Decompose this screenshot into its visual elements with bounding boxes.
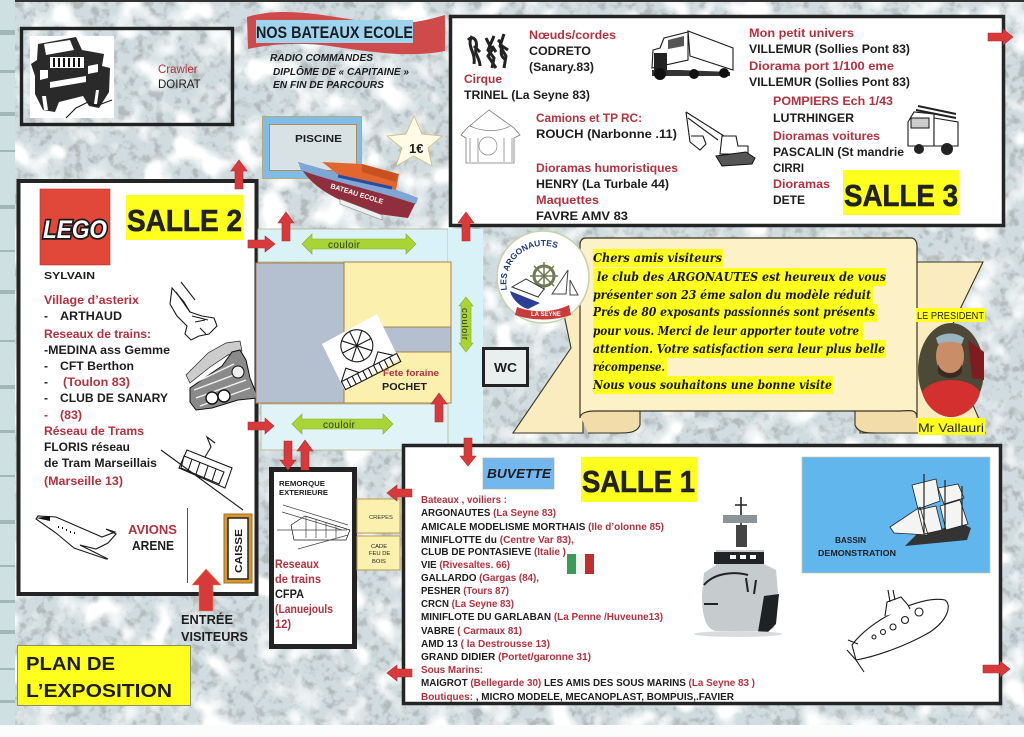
bassin demonstration: DEMONSTRATION — [818, 548, 896, 558]
list: salle 1 exhibitors: MINIFLOTE DU GARLABAN (La Penne /Huveune13) — [421, 611, 663, 623]
crawler text: DOIRAT — [158, 79, 201, 91]
text: radio commandes: DIPLÔME DE « CAPITAINE » — [273, 65, 409, 78]
list: salle 2 exhibitors: Village d’asterix — [44, 293, 139, 307]
list: salle 1 exhibitors: CLUB DE PONTASIEVE (Italie ) — [421, 546, 566, 558]
text: reseaux de trains: de trains — [275, 572, 321, 586]
text: radio commandes: EN FIN DE PARCOURS — [273, 80, 384, 91]
text: noeuds: CODRETO — [529, 44, 591, 58]
text: camions — [536, 111, 677, 141]
welcome text highlights — [593, 249, 886, 394]
list: salle 2 exhibitors: FLORIS réseau — [44, 440, 130, 454]
crawler text — [158, 64, 201, 91]
welcome text: attention. Votre satisfaction sera leur plus belle — [593, 341, 885, 356]
list: salle 2 exhibitors: CFT Berthon — [60, 359, 134, 373]
title: plan de l'exposition: L’EXPOSITION — [26, 680, 172, 701]
block: gray hall — [256, 263, 344, 403]
list: salle 1 exhibitors: AMD 13 ( la Destrousse 13) — [421, 638, 550, 650]
text: radio commandes — [270, 53, 409, 91]
list: salle 1 exhibitors: AMICALE MODELISME MORTHAIS (Ile d’olonne 85) — [421, 521, 664, 533]
crawler text: Crawler — [158, 64, 198, 76]
list: salle 1 exhibitors: ARGONAUTES (La Seyne 83) — [421, 507, 556, 519]
list: salle 1 exhibitors: VABRE ( Carmaux 81) — [421, 625, 522, 637]
box: cade feu de bois: FEU DE — [369, 551, 390, 557]
arrow: couloir bottom — [292, 414, 393, 434]
text: avions — [128, 522, 177, 553]
welcome text: le club des ARGONAUTES est heureux de vous — [597, 269, 886, 284]
icon: jeep — [30, 36, 114, 118]
title: plan de l'exposition — [18, 646, 190, 706]
photo: president — [918, 323, 984, 417]
text: noeuds: Nœuds/cordes — [529, 28, 616, 42]
text: pompiers: Dioramas voitures — [773, 129, 880, 143]
text: avions: ARENE — [132, 539, 174, 553]
text: entree visiteurs: VISITEURS — [181, 630, 248, 644]
list: salle 1 exhibitors — [421, 494, 755, 703]
list: salle 1 exhibitors: Sous Marins: — [421, 664, 483, 676]
text: pompiers: POMPIERS Ech 1/43 — [773, 94, 893, 108]
welcome text: Nous vous souhaitons une bonne visite — [592, 377, 832, 392]
list: salle 2 exhibitors: - — [44, 408, 48, 422]
list: salle 2 exhibitors: (Toulon 83) — [63, 375, 130, 389]
text: radio commandes: RADIO COMMANDES — [270, 53, 373, 64]
list: salle 2 exhibitors: (Marseille 13) — [44, 474, 123, 488]
arrows: red circulation arrows — [231, 29, 1013, 681]
list: salle 1 exhibitors: Bateaux , voiliers : — [421, 494, 507, 506]
text: mon petit univers: VILLEMUR (Sollies Pont 83) — [749, 75, 910, 89]
text: cirque: Cirque — [464, 72, 502, 86]
bassin demonstration: BASSIN — [835, 535, 866, 545]
floor plan — [256, 229, 483, 451]
icon: truck — [652, 31, 733, 80]
list: salle 2 exhibitors: - — [44, 391, 48, 405]
text: mon petit univers — [749, 26, 910, 89]
text: fete foraine: Fete foraine — [383, 368, 439, 379]
icon: submarine — [847, 590, 948, 672]
icon: galleon — [890, 474, 971, 546]
text: reseaux de trains: Reseaux — [275, 557, 319, 571]
text: pompiers: LUTRHINGER — [773, 111, 854, 125]
box: cade feu de bois: CADE — [371, 544, 387, 550]
list: salle 1 exhibitors: PESHER (Tours 87) — [421, 585, 509, 597]
list: salle 1 exhibitors: Boutiques: , MICRO MODELE, MECANOPLAST, BOMPUIS,.FAVIER — [421, 691, 734, 703]
icon: star 1 euro — [387, 116, 442, 166]
icon: les argonautes logo: LES ARGONAUTES — [500, 240, 558, 290]
list: salle 1 exhibitors: GALLARDO (Gargas (84), — [421, 572, 539, 584]
panel: salle 1 — [404, 446, 1000, 704]
label: mr vallauri: Mr Vallauri — [918, 421, 984, 435]
text: mon petit univers: VILLEMUR (Sollies Pont 83) — [749, 42, 910, 56]
caisse — [224, 514, 252, 583]
panel: remorque exterieure — [272, 470, 354, 646]
icon: locomotive — [186, 341, 258, 410]
icon: ferris wheel card — [322, 314, 401, 391]
arrow: couloir top: couloir — [328, 240, 361, 251]
text: cirque: TRINEL (La Seyne 83) — [464, 88, 590, 102]
heading: salle 3: SALLE 3 — [844, 178, 958, 213]
heading: salle 1: SALLE 1 — [582, 464, 695, 499]
text: noeuds: (Sanary.83) — [529, 60, 594, 74]
panel: crawler — [22, 28, 232, 124]
block: fete foraine — [344, 262, 451, 403]
arrow: entree visiteurs — [192, 569, 221, 611]
icon: asterix — [170, 282, 217, 340]
text: remorque — [279, 479, 328, 497]
text: dioramas humoristiques — [536, 161, 678, 223]
label: le president: LE PRESIDENT — [917, 311, 984, 322]
box: crepes — [357, 499, 400, 533]
ribbon: welcome scroll — [513, 238, 985, 433]
heading: salle 2: SALLE 2 — [127, 203, 242, 238]
list: salle 2 exhibitors: Réseau de Trams — [44, 424, 144, 438]
text: dioramas humoristiques: Dioramas humoristiques — [536, 161, 678, 175]
icon: fire truck — [908, 106, 958, 155]
arrow: couloir top — [302, 234, 416, 254]
text: fete foraine — [382, 368, 439, 393]
text: reseaux de trains — [275, 557, 333, 631]
text: camions: ROUCH (Narbonne .11) — [536, 127, 677, 141]
text: remorque: EXTERIEURE — [279, 488, 328, 497]
text: mon petit univers: Mon petit univers — [749, 26, 854, 40]
icon: tram — [161, 437, 243, 510]
list: salle 2 exhibitors: (83) — [60, 408, 82, 422]
arrow: couloir right: couloir — [459, 308, 470, 340]
buvette: BUVETTE — [487, 466, 551, 481]
arrow: couloir right — [459, 297, 473, 352]
list: salle 1 exhibitors: VIE (Rivesaltes. 66) — [421, 559, 510, 571]
icon: knots — [468, 34, 508, 68]
welcome text: présenter son 23 éme salon du modèle réduit — [593, 287, 871, 302]
scroll body — [580, 238, 917, 418]
welcome text: Chers amis visiteurs — [593, 250, 722, 265]
caisse: CAISSE — [233, 529, 245, 573]
welcome text — [592, 250, 886, 392]
heading: nos bateaux ecole: NOS BATEAUX ECOLE — [256, 23, 413, 42]
heading: nos bateaux ecole — [247, 12, 445, 54]
welcome text: récompense. — [593, 359, 665, 374]
text: dioramas humoristiques: HENRY (La Turbale 44) — [536, 177, 669, 191]
bassin demonstration — [802, 457, 990, 573]
icon: plane — [36, 516, 116, 559]
list: salle 2 exhibitors: SYLVAIN — [44, 270, 95, 282]
text: camions: Camions et TP RC: — [536, 111, 642, 125]
box: crepes: CREPES — [369, 515, 393, 521]
panel: salle 3 — [450, 16, 1004, 226]
welcome text: Prés de 80 exposants passionnés sont présents — [592, 304, 875, 319]
list: salle 2 exhibitors: -MEDINA ass Gemme — [44, 343, 170, 357]
list: salle 1 exhibitors: GRAND DIDIER (Portet/garonne 31) — [421, 651, 591, 663]
text: pompiers: Dioramas — [773, 177, 830, 191]
wc box: WC — [494, 360, 518, 375]
icon: lego logo: LEGO — [43, 216, 107, 244]
text: entree visiteurs — [181, 612, 248, 644]
list: salle 1 exhibitors: MAIGROT (Bellegarde 30) LES AMIS DES SOUS MARINS (La Seyne 83 ) — [421, 677, 755, 689]
president — [916, 308, 985, 435]
text: pompiers: CIRRI — [773, 161, 804, 175]
text: pompiers — [773, 94, 904, 207]
icon: circus tent — [461, 110, 520, 163]
text: cirque — [464, 72, 590, 102]
corridor: right — [448, 229, 483, 451]
buvette — [483, 458, 554, 489]
icon: bateau ecole: BATEAU ECOLE — [329, 183, 384, 206]
list: salle 1 exhibitors: CRCN (La Seyne 83) — [421, 598, 514, 610]
text: avions: AVIONS — [128, 522, 177, 537]
text: entree visiteurs: ENTRÉE — [181, 612, 233, 627]
text: reseaux de trains: CFPA — [275, 587, 304, 601]
text: remorque: REMORQUE — [279, 479, 325, 488]
text: mon petit univers: Diorama port 1/100 eme — [749, 59, 894, 73]
list: salle 2 exhibitors: CLUB DE SANARY — [60, 391, 168, 405]
icon: warship — [694, 497, 782, 637]
panel: piscine: PISCINE — [295, 133, 342, 145]
ribbon tails — [513, 262, 583, 433]
list: salle 2 exhibitors: de Tram Marseillais — [44, 456, 157, 470]
wc box — [484, 348, 528, 386]
icon: les argonautes logo: LA SEYNE — [531, 312, 561, 318]
list: salle 1 exhibitors: MINIFLOTTE du (Centre Var 83), — [421, 534, 574, 546]
block: gray strip — [380, 327, 451, 352]
list: salle 2 exhibitors: - — [44, 359, 48, 373]
list: salle 2 exhibitors: - — [44, 309, 48, 323]
text: reseaux de trains: (Lanuejouls — [275, 602, 333, 616]
icon: lego logo — [40, 189, 110, 265]
list: salle 2 exhibitors: Reseaux de trains: — [44, 327, 151, 341]
panel: salle 2 — [18, 181, 258, 594]
text: dioramas humoristiques: FAVRE AMV 83 — [536, 209, 628, 223]
panel: piscine — [262, 116, 362, 178]
list: salle 2 exhibitors — [44, 270, 170, 488]
title: plan de l'exposition: PLAN DE — [26, 653, 115, 674]
text: dioramas humoristiques: Maquettes — [536, 193, 599, 207]
icon: star 1 euro: 1€ — [409, 141, 423, 156]
arrow: couloir bottom: couloir — [323, 420, 356, 431]
text: pompiers: DETE — [773, 193, 805, 207]
corridor: top — [258, 229, 448, 262]
icon: excavator — [686, 112, 755, 166]
box: cade feu de bois: BOIS — [372, 559, 386, 565]
icon: train — [277, 505, 350, 549]
welcome text: pour vous. Merci de leur apporter toute votre — [593, 323, 859, 338]
text: pompiers: PASCALIN (St mandrie — [773, 145, 904, 159]
box: cade feu de bois — [357, 536, 400, 570]
list: salle 2 exhibitors: - — [44, 375, 48, 389]
text: fete foraine: POCHET — [382, 381, 428, 393]
corridor: bottom — [261, 404, 448, 450]
icon: les argonautes logo — [496, 230, 590, 324]
text: reseaux de trains: 12) — [275, 617, 291, 631]
text: noeuds — [529, 28, 616, 74]
icon: bateau ecole — [298, 162, 418, 220]
icon: italian flag — [567, 554, 594, 574]
list: salle 2 exhibitors: ARTHAUD — [60, 309, 122, 323]
